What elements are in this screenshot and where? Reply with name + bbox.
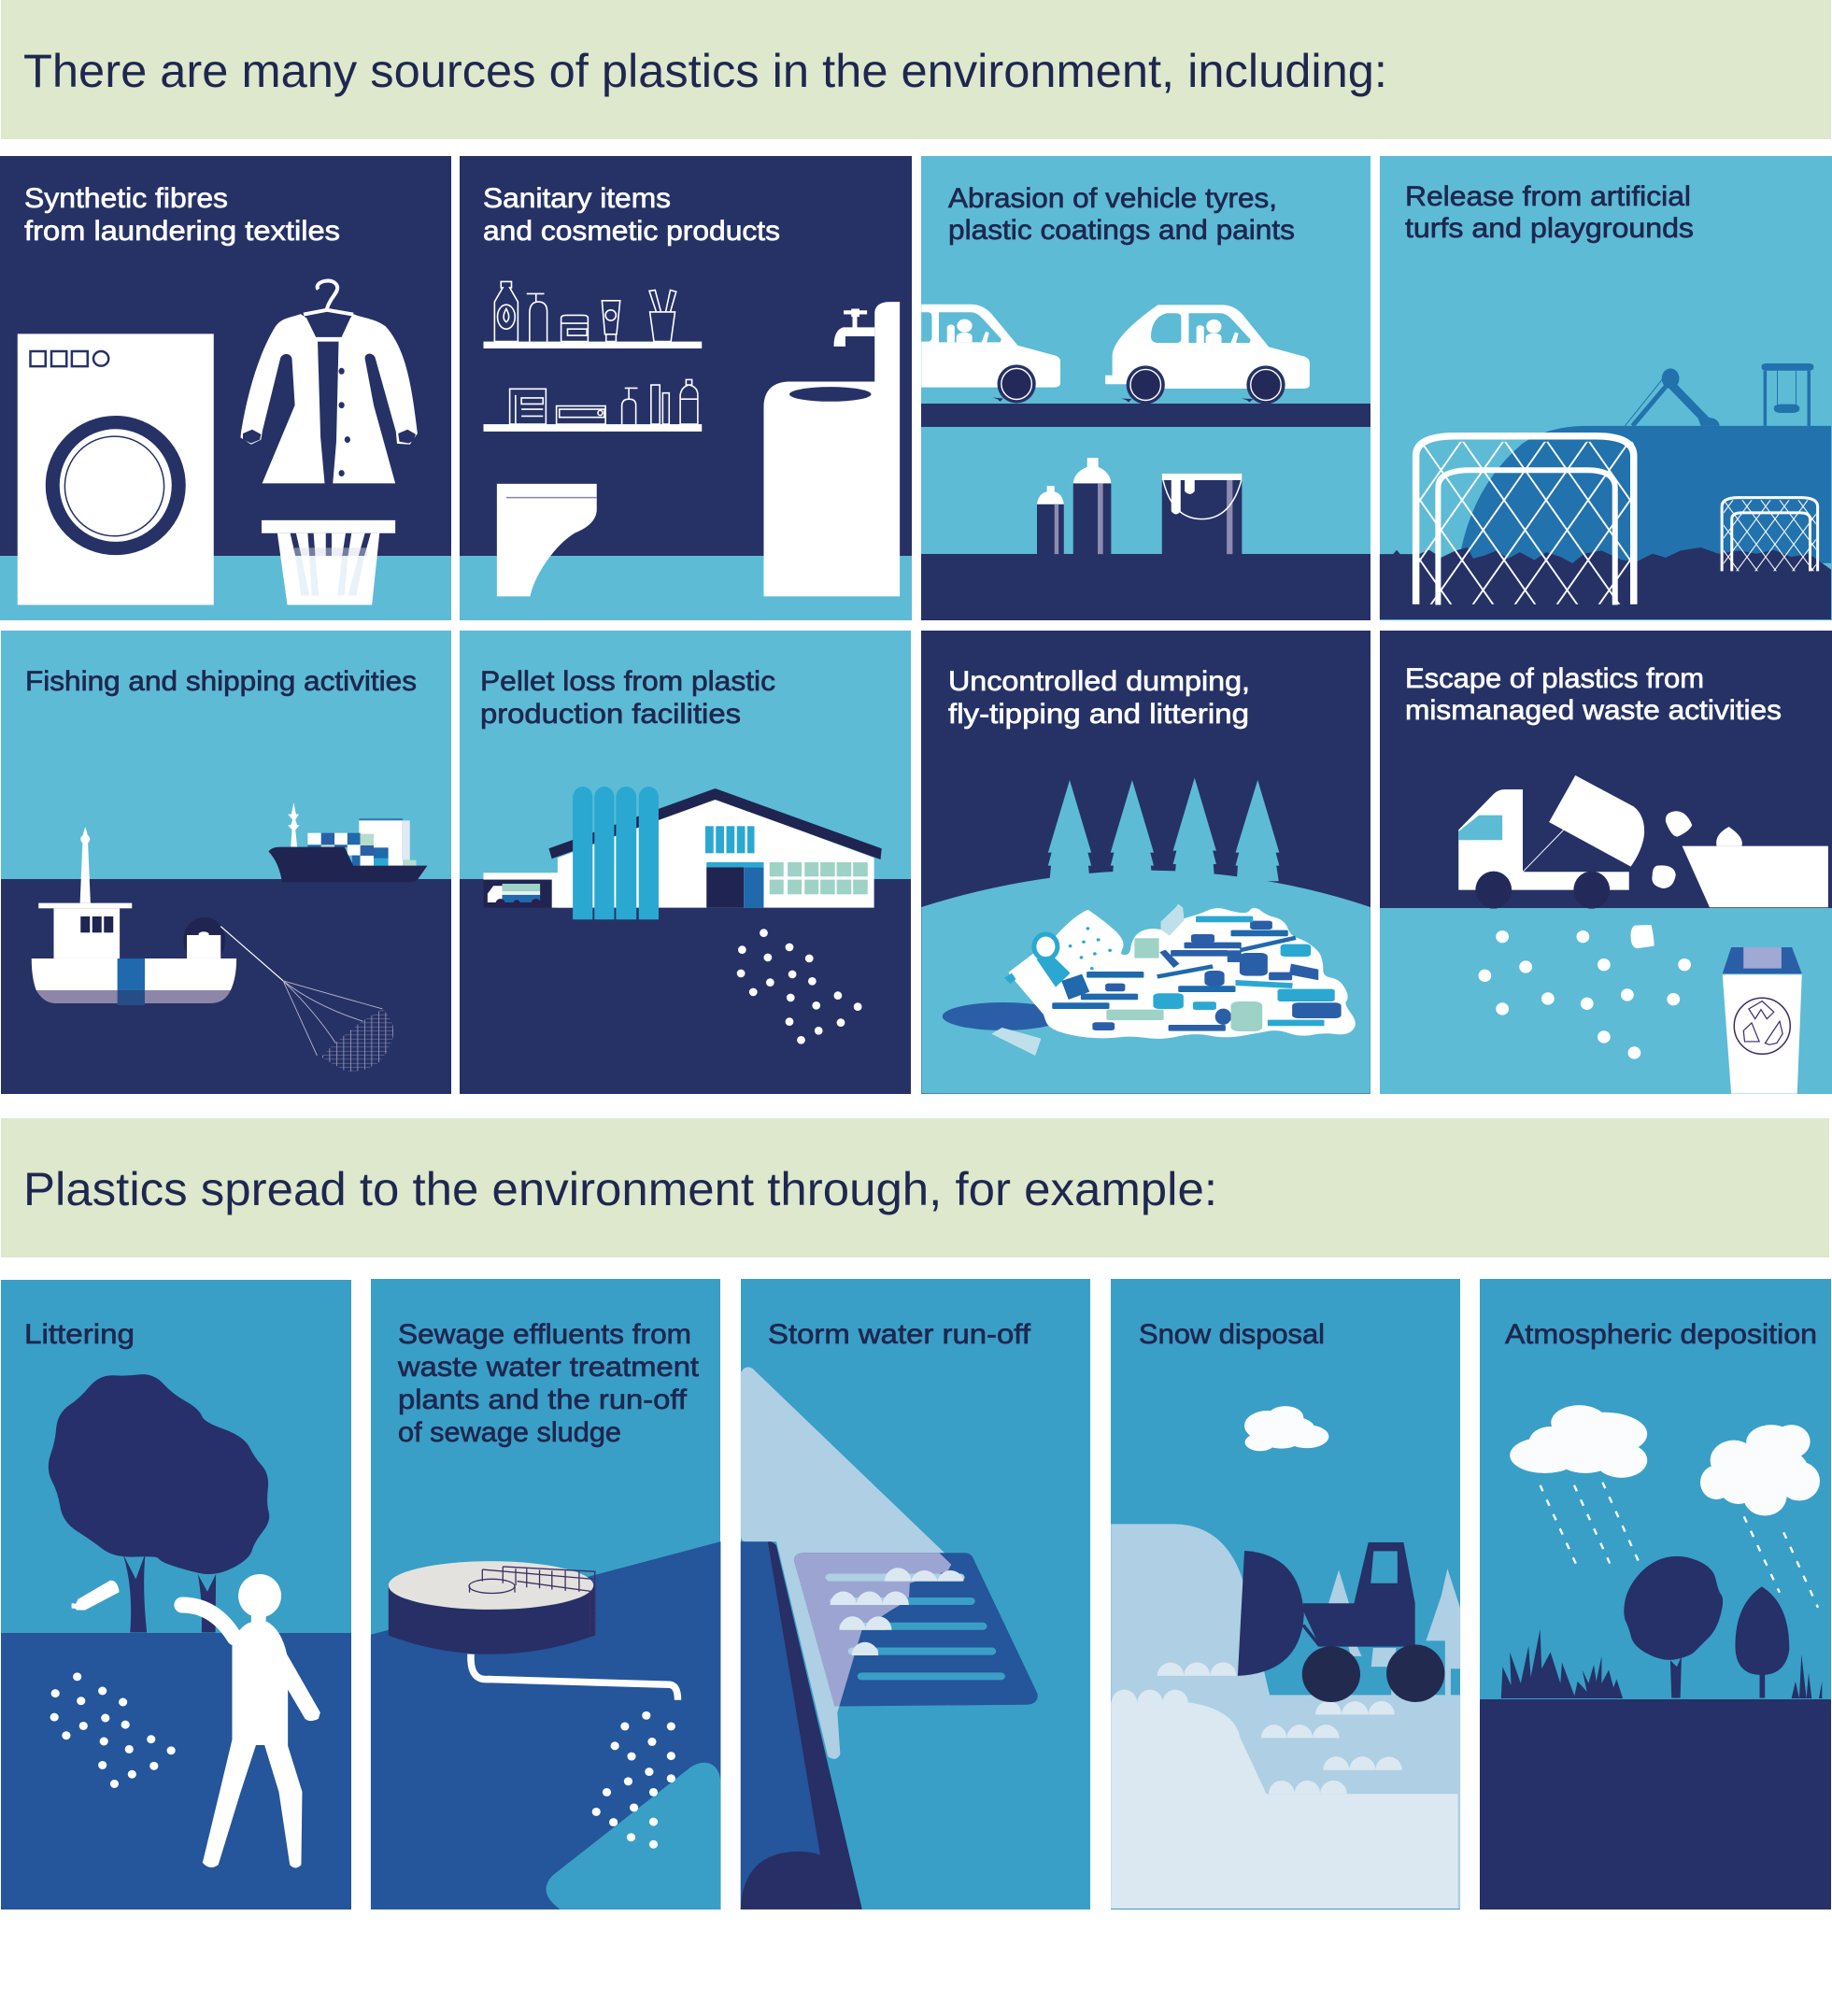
icon: left cloud <box>1510 1405 1647 1478</box>
panel: sewage effluents: plants and the run-off <box>398 1384 688 1415</box>
panel: mismanaged waste: mismanaged waste activities <box>1405 695 1782 726</box>
icon: upper shelf with toiletries <box>484 281 702 348</box>
icon: oval tree <box>1735 1586 1789 1698</box>
bright snow foreground <box>1111 1662 1458 1909</box>
icon: large goal <box>1416 436 1634 605</box>
panel: fishing and shipping <box>1 631 451 1094</box>
panel: sanitary items: and cosmetic products <box>483 216 780 247</box>
icon: dump truck <box>1458 775 1644 909</box>
pellets <box>592 1711 675 1849</box>
icon: coat on hanger <box>241 281 418 483</box>
panel: atmospheric deposition: Atmospheric deposition <box>1505 1319 1817 1350</box>
icon: playground hill <box>1458 363 1831 563</box>
icon: falling waste <box>1652 811 1742 888</box>
ground slope <box>371 1541 720 1910</box>
pellets <box>1478 925 1691 1059</box>
panel: pellet loss: Pellet loss from plastic <box>480 666 775 697</box>
road <box>741 1541 831 1910</box>
icon: plastic bottles <box>991 904 1185 1056</box>
icon: round tree <box>1626 1558 1721 1698</box>
road edge and kerb <box>741 1541 862 1910</box>
panel: vehicle tyres, coatings and paints: Abrasion of vehicle tyres, <box>948 183 1277 214</box>
panel: vehicle tyres, coatings and paints: plastic coatings and paints <box>948 215 1295 246</box>
heading: sources of plastics: There are many sources of plastics in the environment, including: <box>23 45 1387 97</box>
panel: sanitary items <box>460 156 912 620</box>
panel: vehicle tyres, coatings and paints <box>921 156 1370 620</box>
icon: fishing net <box>220 927 393 1072</box>
panel: sanitary items: Sanitary items <box>483 183 671 214</box>
panel: storm water run-off: Storm water run-off <box>768 1319 1031 1350</box>
icon: sink and tap <box>764 302 900 596</box>
panel: synthetic fibres: Synthetic fibres <box>24 183 228 214</box>
panel: fishing and shipping: Fishing and shipping activities <box>25 666 417 697</box>
parking lot <box>794 1553 1038 1706</box>
panel: littering: Littering <box>24 1319 135 1350</box>
icon: plastic bottle <box>73 1582 119 1609</box>
panel: mismanaged waste: Escape of plastics from <box>1405 663 1704 694</box>
icon: grass <box>1501 1629 1822 1698</box>
icon: background trees <box>1328 1569 1460 1696</box>
icon: spray cans <box>1037 458 1111 554</box>
icon: person throwing <box>182 1574 320 1867</box>
icon: lower shelf with cosmetics <box>484 379 702 432</box>
panel: artificial turfs and playgrounds <box>1380 156 1832 620</box>
pellets <box>50 1672 176 1788</box>
foam waves <box>831 1568 964 1655</box>
icon: right cloud <box>1700 1425 1820 1515</box>
panel: snow disposal <box>1111 1279 1460 1910</box>
panel: artificial turfs and playgrounds: turfs and playgrounds <box>1405 213 1694 244</box>
panel: pellet loss <box>460 631 911 1094</box>
panel: sewage effluents: waste water treatment <box>397 1352 700 1383</box>
icon: outflow pipe <box>471 1654 678 1700</box>
icon: factory <box>484 788 882 908</box>
icon: washing machine <box>18 334 214 605</box>
turf ground <box>1380 547 1831 619</box>
pellets <box>737 929 861 1044</box>
panel: synthetic fibres: from laundering textiles <box>24 216 340 247</box>
panel: uncontrolled dumping <box>921 631 1370 1094</box>
icon: waste pile <box>1004 910 1354 1037</box>
icon: fir trees <box>1048 778 1279 881</box>
panel: littering <box>1 1280 351 1910</box>
icon: treatment tank <box>389 1561 596 1654</box>
panel: snow disposal: Snow disposal <box>1139 1319 1325 1350</box>
panel: artificial turfs and playgrounds: Release from artificial <box>1405 181 1691 212</box>
icon: small goal <box>1722 498 1818 571</box>
icon: sludge pile <box>546 1763 720 1910</box>
heading: how plastics spread: Plastics spread to the environment through, for example: <box>23 1163 1217 1215</box>
icon: puddle <box>943 1002 1064 1030</box>
icon: car left <box>921 305 1060 404</box>
icon: cargo ship <box>269 802 428 882</box>
icon: car right <box>1105 305 1310 405</box>
panel: sewage effluents <box>371 1279 720 1910</box>
icon: trees <box>50 1376 267 1632</box>
icon: fishing boat <box>32 827 236 1005</box>
heading: sources of plastics <box>1 0 1831 139</box>
hill <box>921 871 1370 1094</box>
icon: skip container <box>1683 846 1828 907</box>
icon: cloud <box>1244 1406 1328 1451</box>
icon: recycling bin <box>1723 947 1802 1094</box>
panel: uncontrolled dumping: fly-tipping and littering <box>948 699 1249 730</box>
panel: sewage effluents: of sewage sludge <box>398 1417 621 1448</box>
panel: uncontrolled dumping: Uncontrolled dumping, <box>948 666 1250 697</box>
icon: paint tin <box>1162 474 1242 554</box>
water flow <box>741 1367 952 1759</box>
heading: how plastics spread <box>1 1118 1829 1257</box>
icon: toilet <box>497 484 597 596</box>
panel: pellet loss: production facilities <box>480 699 741 730</box>
panel: sewage effluents: Sewage effluents from <box>398 1319 691 1350</box>
rain <box>1541 1483 1818 1608</box>
panel: atmospheric deposition <box>1480 1279 1831 1910</box>
icon: silos <box>573 787 659 919</box>
panel: mismanaged waste <box>1380 631 1832 1094</box>
icon: snow plough tractor <box>1238 1542 1444 1702</box>
icon: laundry basket <box>262 520 395 605</box>
snow heap <box>1111 1524 1460 1909</box>
panel: synthetic fibres <box>0 156 451 620</box>
panel: storm water run-off <box>741 1279 1090 1910</box>
